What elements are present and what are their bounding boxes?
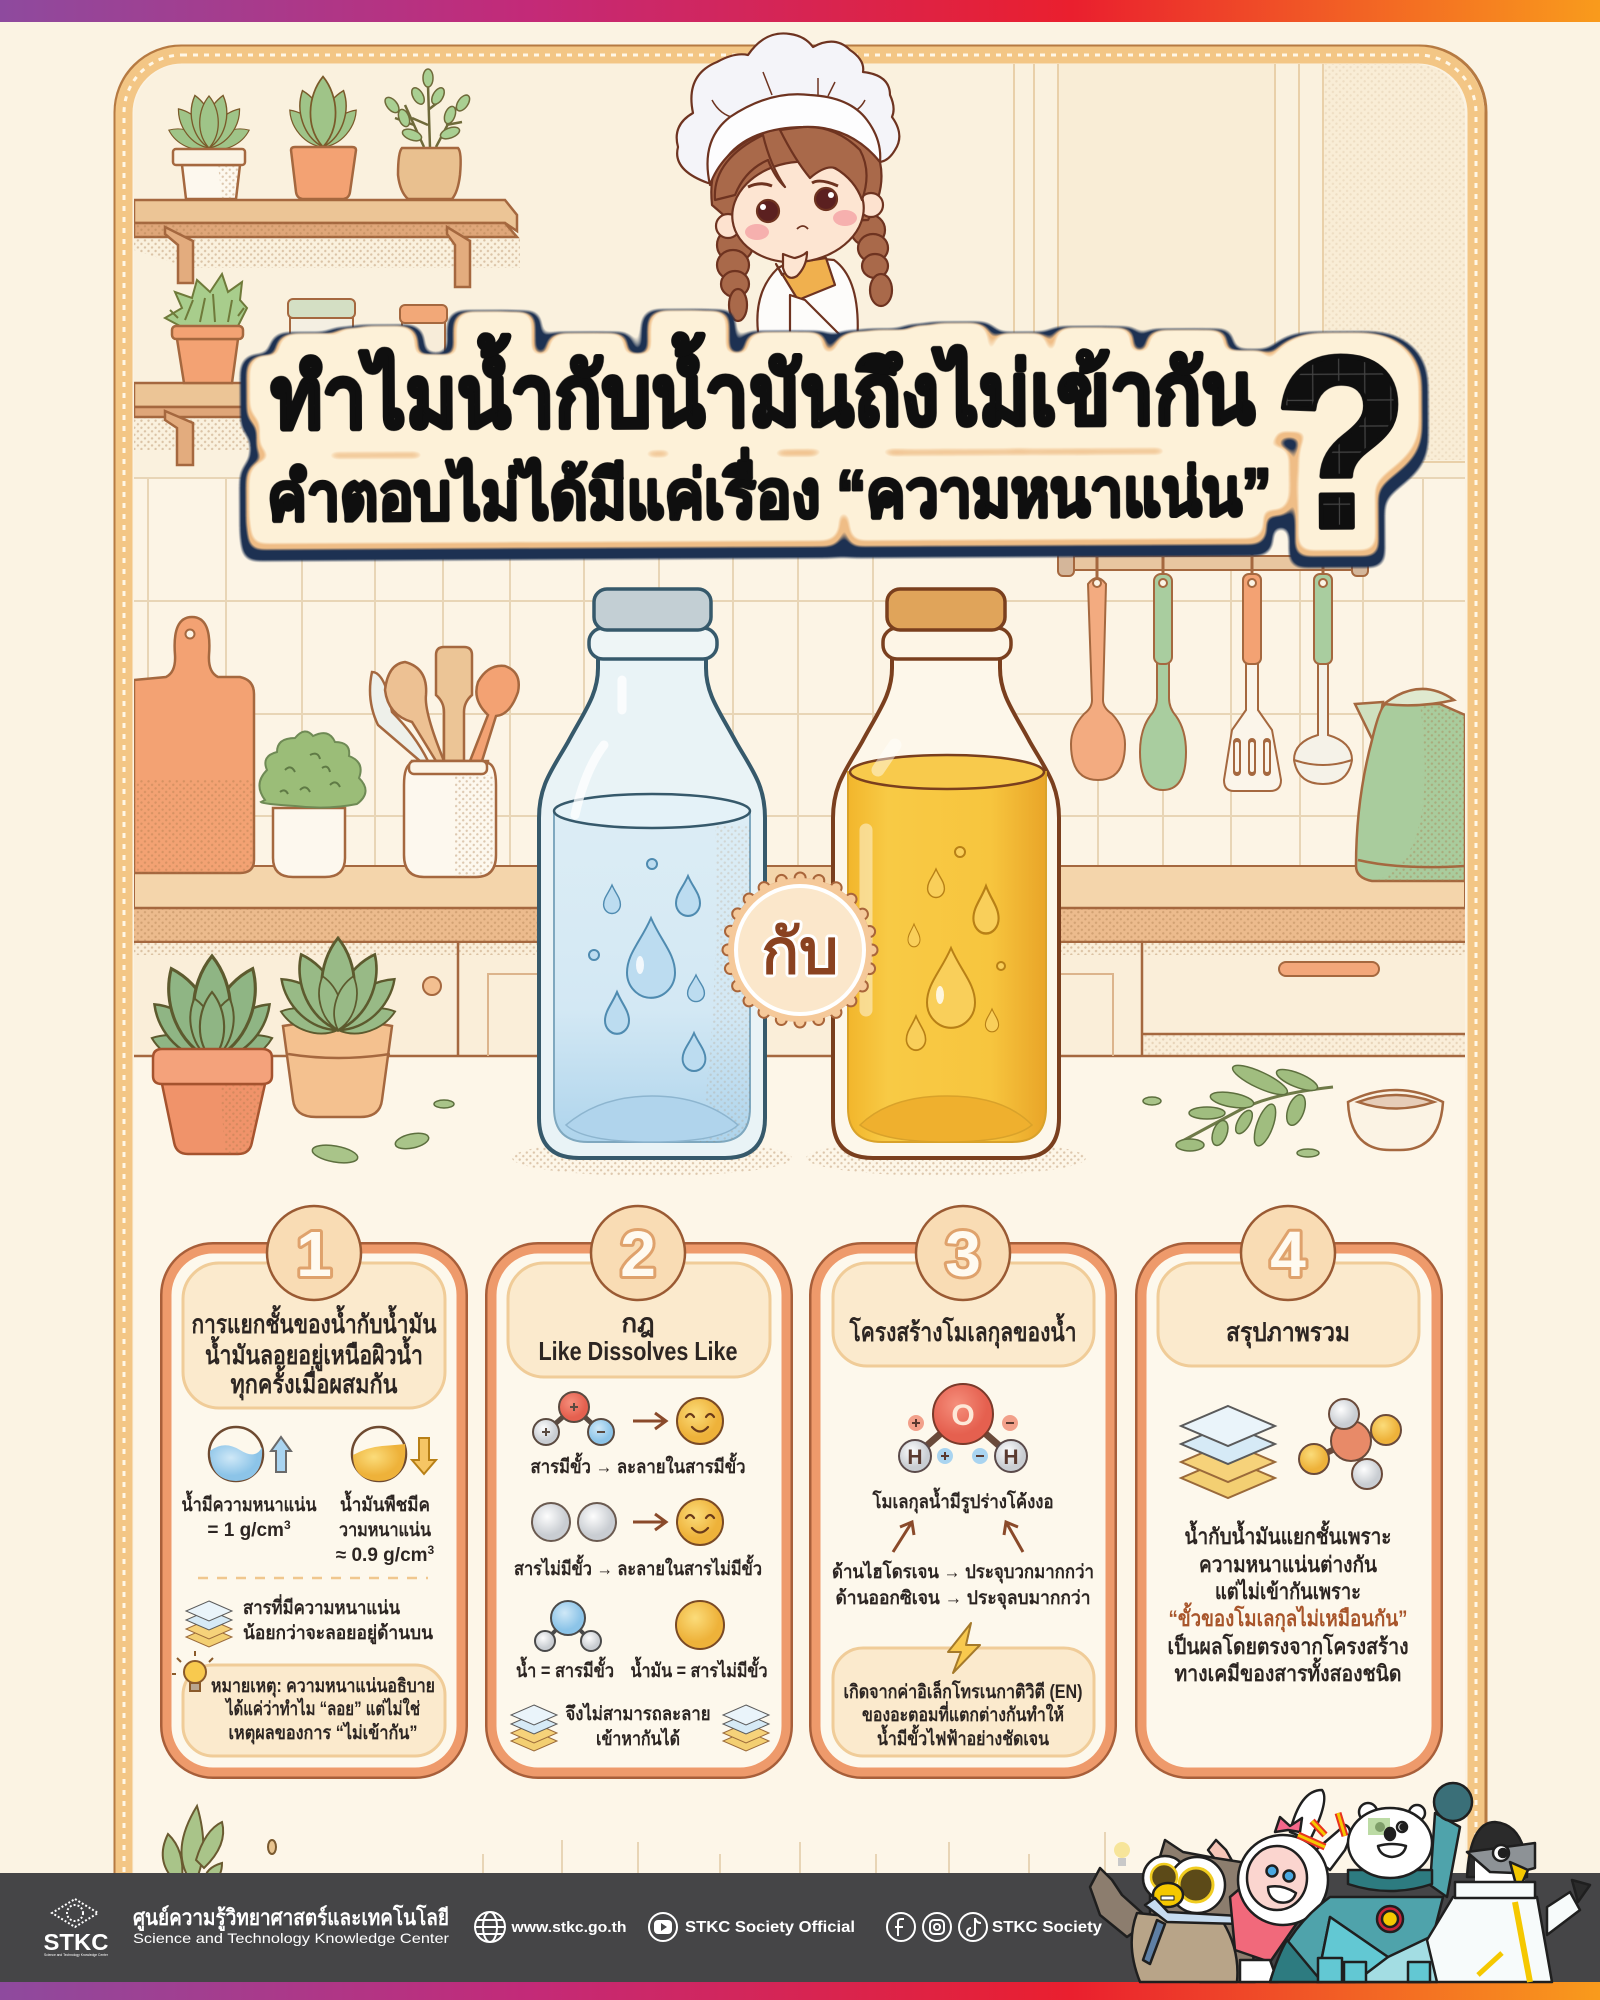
water density — [182, 1490, 316, 1541]
summary: ความหนาแน่นต่างกัน — [1199, 1552, 1377, 1577]
arrow left — [893, 1522, 914, 1552]
water molecule: H — [1003, 1446, 1019, 1469]
title line 1: ทำไมน้ำกับน้ำมันถึงไม่เข้ากัน — [270, 330, 1255, 447]
seal teeth — [728, 878, 872, 1022]
charge text — [832, 1560, 1094, 1610]
penguin — [1427, 1822, 1590, 1982]
seal inner — [736, 886, 864, 1014]
bottle collar — [589, 628, 717, 659]
card 3 — [816, 1206, 1110, 1772]
oil drops — [906, 847, 1005, 1050]
card frame — [167, 1249, 461, 1772]
summary: ทางเคมีของสารทั้งสองชนิด — [1174, 1657, 1402, 1686]
conclusion — [566, 1702, 710, 1750]
arrow — [633, 1413, 666, 1429]
organisation name: Science and Technology Knowledge Center — [133, 1930, 449, 1946]
number badge — [916, 1206, 1010, 1300]
water body — [554, 811, 750, 1142]
layer note: น้อยกว่าจะลอยอยู่ด้านบน — [243, 1622, 433, 1645]
bolt icon — [948, 1623, 980, 1673]
card frame — [1142, 1249, 1436, 1772]
shape caption: โมเลกุลน้ำมีรูปร่างโค้งงอ — [872, 1487, 1054, 1514]
layers left — [511, 1705, 557, 1751]
arrow — [633, 1514, 666, 1530]
utensil jar — [370, 647, 519, 877]
chef character — [677, 33, 899, 345]
molecule — [1299, 1399, 1401, 1489]
note text — [211, 1676, 435, 1745]
card 4 — [1142, 1206, 1436, 1772]
social name: STKC Society — [992, 1919, 1102, 1936]
heading — [192, 1304, 437, 1401]
potted herb — [259, 731, 366, 877]
succulent terracotta — [145, 956, 279, 1154]
heading: ทุกครั้งเมื่อผสมกัน — [230, 1364, 398, 1401]
water molecule: H — [907, 1446, 923, 1469]
succulent tan pot — [272, 938, 404, 1117]
charge text: ด้านออกซิเจน → ประจุลบมากกว่า — [836, 1587, 1090, 1610]
note text: น้ำมีขั้วไฟฟ้าอย่างชัดเจน — [877, 1724, 1049, 1750]
logo: STKC — [44, 1929, 108, 1955]
chef eyebrows — [748, 181, 838, 187]
heading: โครงสร้างโมเลกุลของน้ำ — [849, 1312, 1076, 1349]
heading: Like Dissolves Like — [538, 1336, 738, 1366]
question mark: ? — [1272, 305, 1410, 580]
hanging green spoon — [1140, 574, 1186, 790]
number badge — [267, 1206, 361, 1300]
bottom gradient bar — [0, 1982, 1600, 2000]
note text: เหตุผลของการ “ไม่เข้ากัน” — [228, 1721, 418, 1745]
plant in white pot — [166, 93, 252, 199]
layers icon — [1181, 1406, 1275, 1498]
herb sprig — [1176, 1060, 1333, 1151]
wall shelf lower — [134, 383, 252, 465]
water ball icon — [209, 1427, 263, 1481]
hanging spatula — [1224, 574, 1281, 791]
kitchen scene — [134, 64, 1465, 1956]
water molecule — [899, 1384, 1027, 1472]
oil density: 3 — [428, 1543, 435, 1557]
small seed — [268, 1840, 276, 1854]
polar rule: สารมีขั้ว → ละลายในสารมีขั้ว — [530, 1452, 746, 1478]
oil density — [336, 1490, 435, 1566]
instagram icon — [923, 1913, 951, 1941]
bottle shadow — [512, 1140, 792, 1176]
note text: หมายเหตุ: ความหนาแน่นอธิบาย — [211, 1676, 435, 1698]
layer note: สารที่มีความหนาแน่น — [243, 1594, 400, 1619]
footer band — [0, 1873, 1600, 1982]
glass body — [539, 630, 765, 1158]
glass body — [833, 630, 1059, 1158]
upper wall with cabinets — [1013, 64, 1465, 463]
hanging ladle — [1294, 574, 1352, 784]
layers right — [723, 1705, 769, 1751]
water label: น้ำ = สารมีขั้ว — [516, 1656, 614, 1682]
oil ball icon — [352, 1427, 406, 1481]
oil bottle — [806, 589, 1086, 1176]
drop highlight — [936, 986, 944, 1004]
title — [266, 305, 1410, 585]
header pill — [508, 1263, 770, 1377]
counter and cabinets — [134, 866, 1465, 1956]
logo — [44, 1899, 109, 1957]
non-polar balls — [532, 1503, 616, 1541]
oil density: ≈ 0.9 g/cm — [336, 1545, 428, 1566]
website: www.stkc.go.th — [510, 1919, 626, 1936]
plant in tan pot — [382, 69, 472, 199]
mascot group — [1090, 1783, 1590, 1982]
summary: น้ำกับน้ำมันแยกชั้นเพราะ — [1184, 1520, 1392, 1549]
tiktok icon — [959, 1913, 987, 1941]
chef bangs — [715, 127, 867, 200]
card frame band — [816, 1249, 1110, 1772]
chef hat band — [708, 94, 880, 185]
water density: น้ำมีความหนาแน่น — [182, 1490, 316, 1516]
water drops — [589, 859, 705, 1071]
bottle collar — [883, 628, 1011, 659]
arrow down — [412, 1438, 436, 1474]
heading: กฎ — [621, 1308, 655, 1338]
note text: ได้แค่ว่าทำไม “ลอย” แต่ไม่ใช่ — [224, 1697, 420, 1720]
organisation name: ศูนย์ความรู้วิทยาศาสตร์และเทคโนโลยี — [133, 1904, 449, 1932]
card frame band — [1142, 1249, 1436, 1772]
conclusion: เข้าหากันได้ — [596, 1727, 680, 1750]
chef apron — [776, 258, 835, 300]
wall shelf top — [134, 200, 517, 287]
card 1 — [167, 1206, 461, 1772]
chef ears — [716, 193, 883, 238]
bottle cap — [594, 589, 711, 630]
chef hat pleats — [712, 72, 865, 118]
card frame band — [167, 1249, 461, 1772]
chef blush — [745, 210, 857, 240]
oil density: วามหนาแน่น — [339, 1520, 431, 1541]
seal word: กับ — [762, 918, 838, 987]
header pill — [1158, 1263, 1419, 1366]
chef hand — [783, 252, 807, 278]
heading — [538, 1308, 738, 1366]
bottom-left plant — [163, 1806, 223, 1880]
bulb icon — [172, 1651, 213, 1691]
owl — [1090, 1840, 1255, 1982]
jars on lower shelf — [287, 298, 448, 352]
note pill — [833, 1648, 1094, 1756]
bottle shadow — [806, 1140, 1086, 1176]
number badge — [1241, 1206, 1335, 1300]
smile icon — [677, 1398, 723, 1444]
chef hair — [711, 127, 882, 225]
number badge: 4 — [1270, 1218, 1306, 1290]
note text — [844, 1679, 1082, 1750]
drawer handle — [1279, 962, 1379, 976]
summary — [1168, 1520, 1408, 1686]
bottom ellipse — [566, 1096, 738, 1142]
layer note — [243, 1594, 433, 1645]
number badge: 2 — [620, 1218, 656, 1290]
hanging rail — [1058, 552, 1368, 580]
water molecule — [535, 1601, 601, 1651]
water shade — [700, 825, 750, 1142]
note pill — [183, 1665, 445, 1756]
polar molecule — [533, 1392, 614, 1445]
oil body — [848, 772, 1046, 1142]
oil surface — [850, 755, 1044, 789]
title line 2: คำตอบไม่ได้มีแค่เรื่อง “ความหนาแน่น” — [267, 445, 1272, 534]
cutting board — [134, 617, 254, 873]
summary: “ขั้วของโมเลกุลไม่เหมือนกัน” — [1168, 1602, 1408, 1633]
chef face — [726, 153, 870, 271]
organisation name — [133, 1904, 449, 1946]
non-polar rule: สารไม่มีขั้ว → ละลายในสารไม่มีขั้ว — [514, 1554, 762, 1580]
logo: Science and Technology Knowledge Center — [44, 1952, 109, 1957]
charge text: ด้านไฮโดรเจน → ประจุบวกมากกว่า — [832, 1560, 1094, 1584]
bulb glow — [1114, 1842, 1130, 1866]
rabbit — [1230, 1790, 1350, 1982]
card frame — [816, 1249, 1110, 1772]
hanging orange spoon — [1071, 578, 1125, 780]
plant in orange pot — [289, 75, 358, 199]
bottom ellipse — [860, 1096, 1032, 1142]
chef eyes — [757, 188, 837, 222]
bushy plant in terracotta — [165, 274, 247, 383]
cabinet knob — [423, 977, 441, 995]
highlights — [575, 680, 622, 815]
top gradient bar — [0, 0, 1600, 22]
heading: สรุปภาพรวม — [1226, 1317, 1350, 1349]
oil density: น้ำมันพืชมีค — [340, 1490, 430, 1516]
highlights — [866, 745, 895, 1010]
oil ball — [676, 1601, 724, 1649]
drop highlight — [636, 956, 644, 974]
oil label: น้ำมัน = สารไม่มีขั้ว — [630, 1656, 768, 1682]
card frame — [492, 1249, 786, 1772]
water density: = 1 g/cm — [207, 1520, 284, 1541]
conclusion: จึงไม่สามารถละลาย — [566, 1702, 710, 1725]
seal teeth fill — [728, 878, 872, 1022]
smile icon — [677, 1499, 723, 1545]
kettle — [1355, 689, 1465, 881]
seal: กับ — [728, 878, 872, 1022]
small bowl — [1348, 1090, 1443, 1150]
card frame band — [492, 1249, 786, 1772]
note text: เกิดจากค่าอิเล็กโทรเนกาติวิตี (EN) — [844, 1679, 1082, 1703]
shelf shadows — [134, 237, 520, 450]
chef hat — [677, 33, 899, 183]
faint bottom ticks — [483, 1832, 1105, 1873]
water bottle — [512, 589, 792, 1176]
header pill — [833, 1263, 1094, 1366]
water molecule: O — [951, 1399, 975, 1432]
summary: แต่ไม่เข้ากันเพราะ — [1215, 1578, 1361, 1604]
layers icon — [186, 1601, 232, 1647]
number badge — [591, 1206, 685, 1300]
water density: 3 — [284, 1518, 291, 1532]
number badge: 3 — [945, 1218, 981, 1290]
number badge: 1 — [296, 1218, 332, 1290]
fallen leaves — [311, 1097, 1319, 1166]
heading: การแยกชั้นของน้ำกับน้ำมัน — [192, 1304, 437, 1339]
note text: ของอะตอมที่แตกต่างกันทำให้ — [862, 1701, 1064, 1726]
bear — [1270, 1783, 1472, 1982]
chef nose and mouth — [797, 226, 808, 229]
water surface — [554, 794, 750, 828]
header pill — [183, 1263, 445, 1408]
heading: น้ำมันลอยอยู่เหนือผิวน้ำ — [205, 1335, 423, 1372]
arrow right — [1004, 1522, 1023, 1552]
globe icon — [475, 1912, 505, 1942]
youtube icon — [649, 1913, 677, 1941]
chef braids — [717, 214, 892, 321]
facebook icon — [887, 1913, 915, 1941]
arrow up — [271, 1437, 291, 1472]
youtube name: STKC Society Official — [685, 1919, 855, 1936]
tiled backsplash — [134, 478, 1465, 868]
bottle cap — [887, 589, 1005, 630]
card 2 — [492, 1206, 786, 1772]
summary: เป็นผลโดยตรงจากโครงสร้าง — [1168, 1632, 1408, 1659]
chef jacket — [757, 259, 858, 345]
eye highlights — [760, 192, 834, 210]
